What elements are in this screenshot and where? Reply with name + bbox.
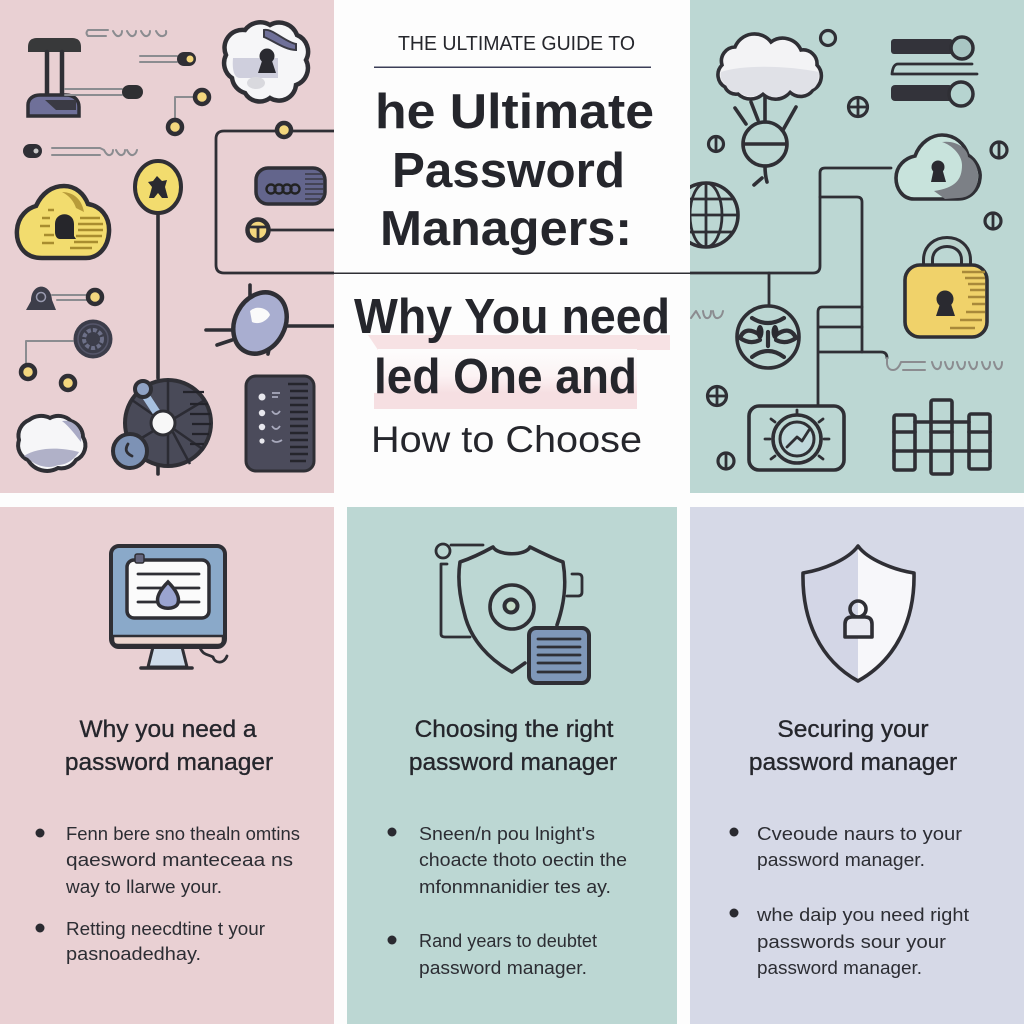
panel: top left illustrations — [0, 0, 334, 493]
icon: yellow balloon with line — [135, 161, 181, 378]
icon: shield with document — [436, 544, 589, 683]
icon: bar circles right — [985, 142, 1007, 229]
bullet list: password manager. — [419, 957, 587, 978]
icon: toggle bars — [891, 37, 977, 106]
panel: securing your password manager — [690, 507, 1024, 1024]
icon: network globe — [737, 306, 799, 368]
bullet list: whe daip you need right — [756, 904, 969, 925]
icon: dashboard dial — [749, 406, 844, 470]
rule under eyebrow — [374, 66, 651, 68]
icon: squiggle label left of globe — [691, 311, 723, 318]
icon: cloud with node below — [718, 34, 821, 185]
icon: shield with lock — [803, 546, 914, 681]
icon: white cloud with keyhole — [224, 22, 308, 101]
icon: connector pill — [140, 52, 196, 66]
bullet list: Sneen/n pou lnight's — [419, 823, 595, 844]
title line 2: Password — [392, 144, 625, 198]
bullet list: Cveoude naurs to your — [757, 823, 962, 844]
icon: bar circle left — [708, 136, 724, 152]
icon: globe clipped — [690, 181, 740, 249]
icon: dark device panel — [246, 376, 314, 471]
icon: squiggle label right — [887, 358, 1002, 370]
icon: ladder connector — [818, 307, 887, 405]
highlight band — [368, 335, 670, 409]
icon: green cloud with keyhole — [896, 135, 980, 199]
heading: Choosing the right — [415, 716, 614, 743]
heading: password manager — [749, 749, 957, 776]
panel: top right illustrations — [674, 0, 1024, 493]
icon: dial disc with key — [113, 380, 211, 474]
icon: node connector pair — [168, 90, 209, 134]
icon: circuit branch — [769, 197, 862, 352]
icon: small person badge — [26, 287, 102, 310]
icon: scanning oval device — [206, 283, 334, 363]
subtitle line 3: How to Choose — [371, 419, 642, 460]
icon: pill with squiggle label — [23, 144, 137, 158]
heading: password manager — [65, 749, 273, 776]
icon: plus circle — [848, 98, 868, 116]
heading: password manager — [409, 749, 617, 776]
bullet list: choacte thoto oectin the — [419, 849, 627, 870]
icon: ring — [820, 30, 836, 46]
icon: gear node — [21, 320, 112, 390]
bullet list: Rand years to deubtet — [419, 930, 597, 951]
icon: plus circle lower — [708, 386, 726, 406]
title line 1: he Ultimate — [375, 85, 654, 139]
subtitle line 1: Why You need — [354, 290, 670, 344]
bullet list: password manager. — [757, 849, 925, 870]
panel: title centre — [334, 0, 690, 493]
rule across title — [334, 272, 690, 274]
bullet list: pasnoadedhay. — [66, 943, 201, 964]
bullet list: password manager. — [757, 957, 922, 978]
heading — [65, 716, 273, 776]
panel: why you need a password manager — [0, 507, 334, 1024]
subtitle line 2: led One and — [374, 350, 637, 404]
eyebrow heading: THE ULTIMATE GUIDE TO — [398, 32, 635, 55]
title line 3: Managers: — [380, 202, 632, 256]
icon: password pill — [256, 168, 325, 204]
icon: small toggle node — [248, 220, 334, 240]
icon: lock padlock — [905, 242, 987, 337]
heading: Why you need a — [79, 716, 257, 743]
bullet list: qaesword manteceaa ns — [66, 849, 293, 870]
icon: squiggle label top — [86, 30, 166, 36]
icon: yellow cloud with keyhole — [17, 186, 109, 258]
heading — [409, 716, 617, 776]
icon: bar circle lower — [718, 453, 734, 469]
icon: circuit frame on right — [690, 168, 891, 273]
icon: circuit frame on left — [216, 131, 334, 273]
icon: grid chart — [894, 400, 990, 474]
bullet list — [388, 823, 627, 978]
icon: small white cloud — [18, 416, 85, 471]
bullet list — [730, 823, 969, 978]
bullet list: passwords sour your — [757, 931, 946, 952]
bullet list — [36, 823, 300, 964]
icon: desk lamp with connector — [28, 38, 143, 116]
bullet list: way to llarwe your. — [65, 876, 222, 897]
icon: frame node — [277, 123, 291, 137]
panel: choosing the right password manager — [347, 507, 677, 1024]
bullet list: Fenn bere sno thealn omtins — [66, 823, 300, 844]
heading — [749, 716, 957, 776]
bullet list: Retting neecdtine t your — [66, 918, 265, 939]
heading: Securing your — [777, 716, 929, 743]
icon: computer monitor with lock — [111, 546, 227, 668]
bullet list: mfonmnanidier tes ay. — [419, 876, 611, 897]
